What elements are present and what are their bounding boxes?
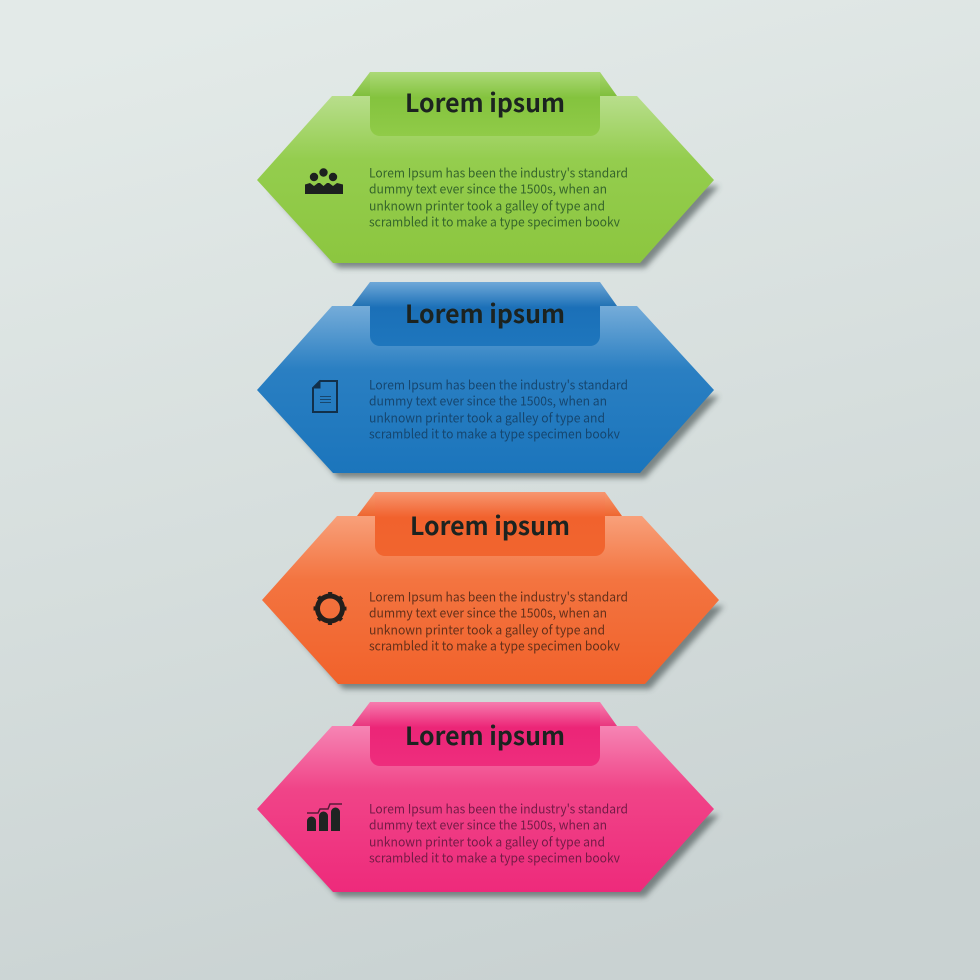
text block: pink: scrambled it to make a type specimen bookv (369, 848, 620, 866)
text block: green: scrambled it to make a type specimen bookv (369, 212, 620, 230)
text block: blue: scrambled it to make a type specimen bookv (369, 424, 620, 442)
text block: orange (369, 586, 628, 654)
text block: orange: dummy text ever since the 1500s, when an (369, 602, 607, 622)
text block: blue: dummy text ever since the 1500s, when an (369, 390, 607, 410)
panel: pink (257, 702, 719, 897)
text block: orange: unknown printer took a galley of type and (369, 620, 605, 638)
text block: pink (369, 798, 628, 866)
text block: pink: Lorem Ipsum has been the industry's standard (369, 798, 628, 818)
text block: green: Lorem Ipsum has been the industry's standard (369, 162, 628, 182)
icon: bar chart (307, 804, 342, 831)
text block: orange: Lorem Ipsum has been the industry's standard (369, 586, 628, 606)
text block: green: dummy text ever since the 1500s, when an (369, 178, 607, 198)
panel: green (257, 72, 719, 268)
text block: blue (369, 374, 628, 442)
text block: orange: scrambled it to make a type specimen bookv (369, 636, 620, 654)
text block: pink: unknown printer took a galley of type and (369, 832, 605, 850)
heading: green: Lorem ipsum (405, 84, 565, 120)
heading: orange: Lorem ipsum (410, 507, 570, 543)
text block: green (369, 162, 628, 230)
text block: blue: unknown printer took a galley of type and (369, 408, 605, 426)
icon: document (313, 381, 337, 412)
heading: pink: Lorem ipsum (405, 717, 565, 753)
heading: blue: Lorem ipsum (405, 295, 565, 331)
text block: blue: Lorem Ipsum has been the industry's standard (369, 374, 628, 394)
text block: pink: dummy text ever since the 1500s, when an (369, 814, 607, 834)
icon: gear (315, 594, 345, 624)
panel: blue (257, 282, 719, 478)
icon: people (305, 168, 343, 194)
panel: orange (262, 492, 724, 689)
text block: green: unknown printer took a galley of type and (369, 196, 605, 214)
